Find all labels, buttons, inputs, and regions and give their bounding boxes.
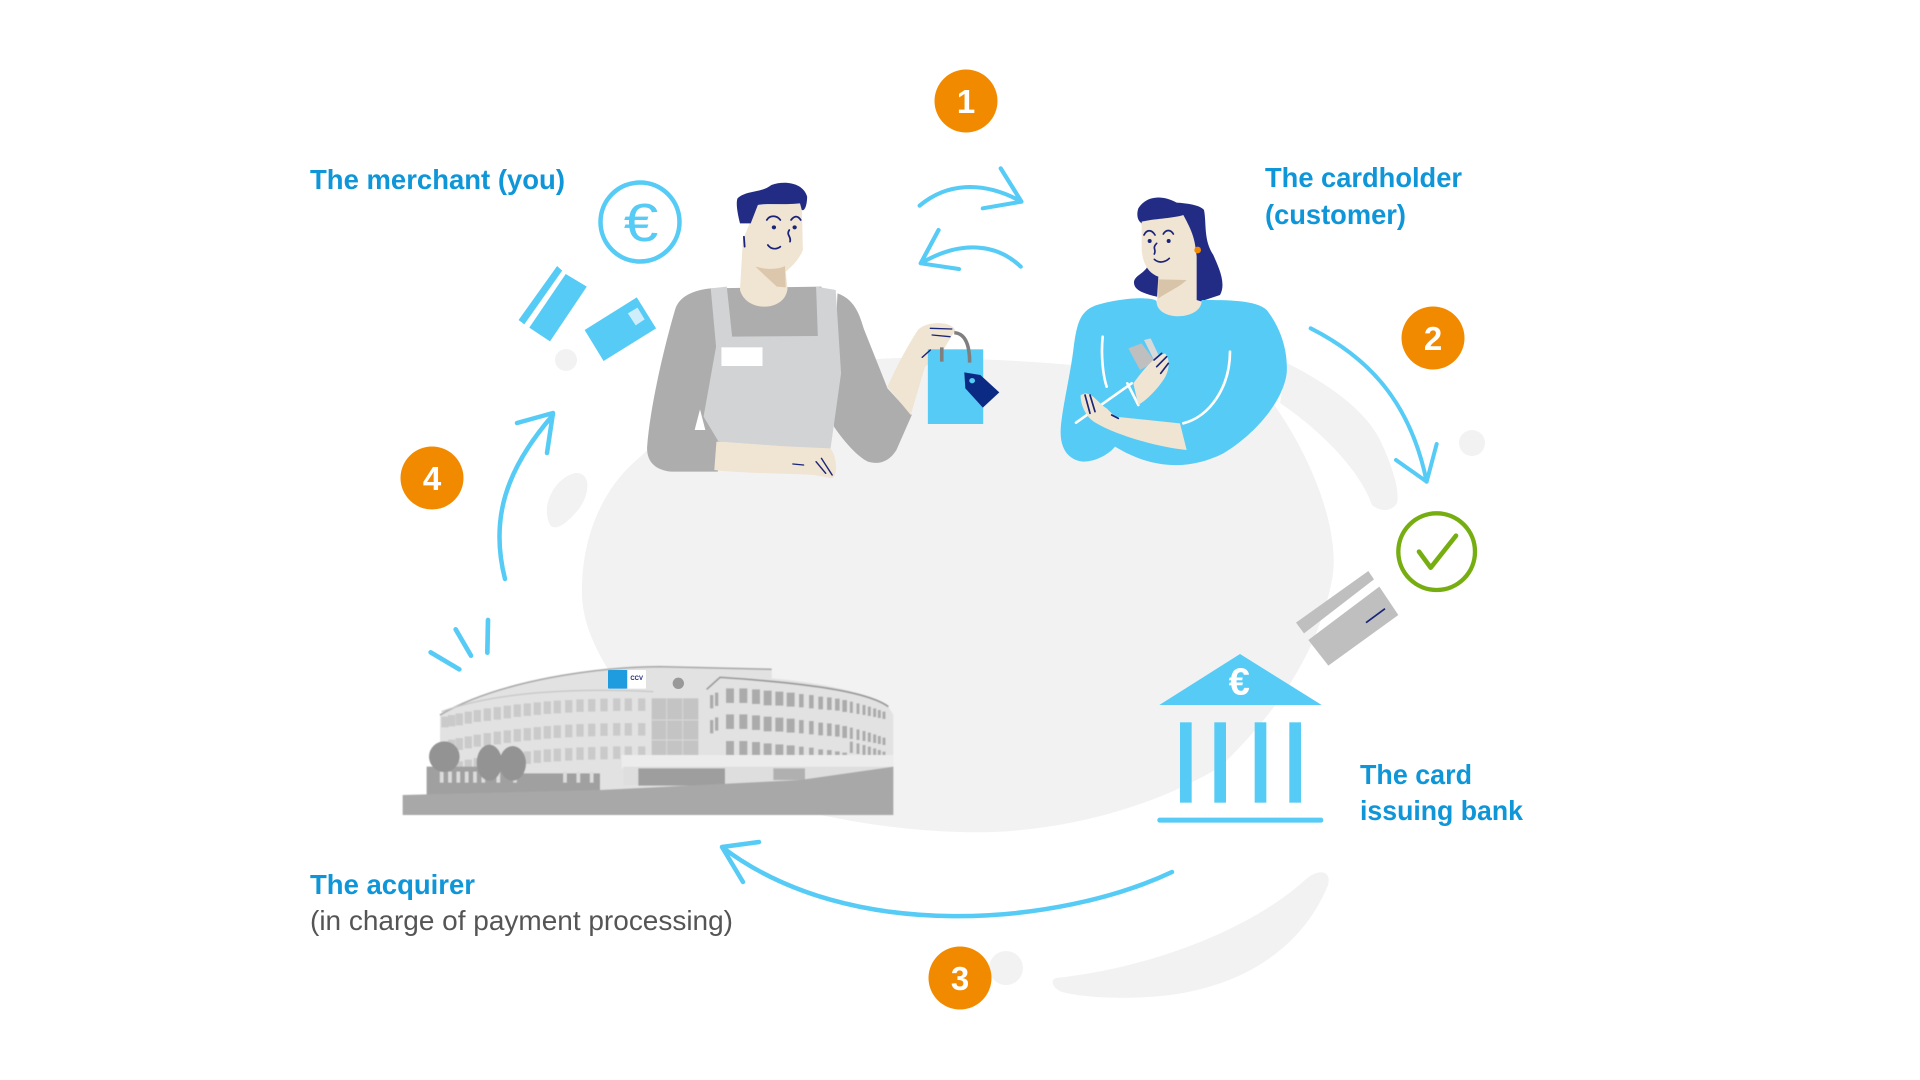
badge 2: 2 bbox=[1424, 320, 1442, 357]
cardholder shirt bbox=[1061, 298, 1287, 465]
badge 1 bbox=[934, 70, 998, 132]
icon: card front bbox=[585, 297, 656, 361]
cardholder hand bbox=[1133, 353, 1169, 405]
building massing bbox=[403, 667, 893, 815]
hedge bbox=[427, 767, 600, 795]
arrow 1 right bbox=[920, 168, 1021, 208]
arrow 2 bbox=[1311, 328, 1437, 482]
trees bbox=[429, 741, 526, 781]
earring bbox=[1194, 247, 1201, 253]
cardholder hair bbox=[1134, 197, 1222, 302]
label: acquirer: The acquirer bbox=[310, 869, 475, 900]
icon: card back bbox=[519, 266, 587, 341]
icon: bank: € bbox=[1229, 662, 1250, 704]
logo signs bbox=[608, 670, 684, 689]
held card bbox=[1128, 338, 1159, 370]
merchant forearm bbox=[714, 442, 836, 478]
merchant face details bbox=[744, 216, 801, 249]
right wing end face bbox=[712, 693, 717, 733]
ground bbox=[403, 767, 893, 815]
label: cardholder: (customer) bbox=[1265, 199, 1406, 230]
badge 4: 4 bbox=[423, 460, 442, 497]
icon: bank bbox=[1157, 654, 1323, 823]
badge 3 bbox=[928, 946, 992, 1010]
sparks bbox=[431, 620, 488, 669]
cardholder neck and face bbox=[1142, 215, 1202, 316]
glass tower bbox=[652, 698, 698, 755]
icon: approved check bbox=[1398, 513, 1475, 590]
label: cardholder: The cardholder bbox=[1265, 162, 1462, 193]
arrow 1 left bbox=[921, 230, 1021, 269]
label: acquirer: (in charge of payment processing) bbox=[310, 905, 733, 936]
left wing windows bbox=[445, 698, 642, 775]
entrance bbox=[622, 755, 893, 768]
shopping bag bbox=[922, 328, 999, 424]
merchant neck and face bbox=[740, 203, 803, 307]
merchant apron bbox=[695, 287, 841, 450]
cardholder arm lines bbox=[1076, 337, 1230, 423]
cardholder neck shadow bbox=[1158, 279, 1187, 298]
badge 3: 3 bbox=[951, 960, 969, 997]
logo signs: CCV bbox=[630, 676, 643, 682]
label: card issuing bank: The card bbox=[1360, 759, 1472, 790]
icon: euro coin bbox=[600, 182, 680, 262]
label: card issuing bank bbox=[1360, 759, 1523, 826]
badge 4 bbox=[400, 446, 464, 510]
merchant neck shadow bbox=[755, 266, 786, 287]
label: acquirer bbox=[310, 869, 733, 936]
label: card issuing bank: issuing bank bbox=[1360, 795, 1523, 826]
figure: cardholder bbox=[1061, 197, 1287, 465]
badge 2 bbox=[1402, 306, 1464, 370]
badge 1: 1 bbox=[957, 83, 975, 120]
merchant body bbox=[647, 287, 912, 472]
arrow 4 bbox=[499, 413, 553, 579]
figure: merchant bbox=[647, 183, 999, 478]
label: cardholder bbox=[1265, 162, 1462, 230]
cardholder lower arm bbox=[1081, 393, 1187, 450]
icon: gray card bbox=[1296, 571, 1398, 666]
label: merchant: The merchant (you) bbox=[310, 164, 565, 195]
icon: euro coin: € bbox=[624, 193, 658, 253]
building photo bbox=[403, 667, 893, 815]
merchant hair bbox=[737, 183, 807, 223]
arrow 3 bbox=[722, 842, 1172, 916]
cardholder face details bbox=[1144, 230, 1173, 262]
background blob bbox=[547, 349, 1485, 998]
merchant hand bbox=[887, 323, 955, 415]
right wing windows bbox=[730, 688, 884, 765]
